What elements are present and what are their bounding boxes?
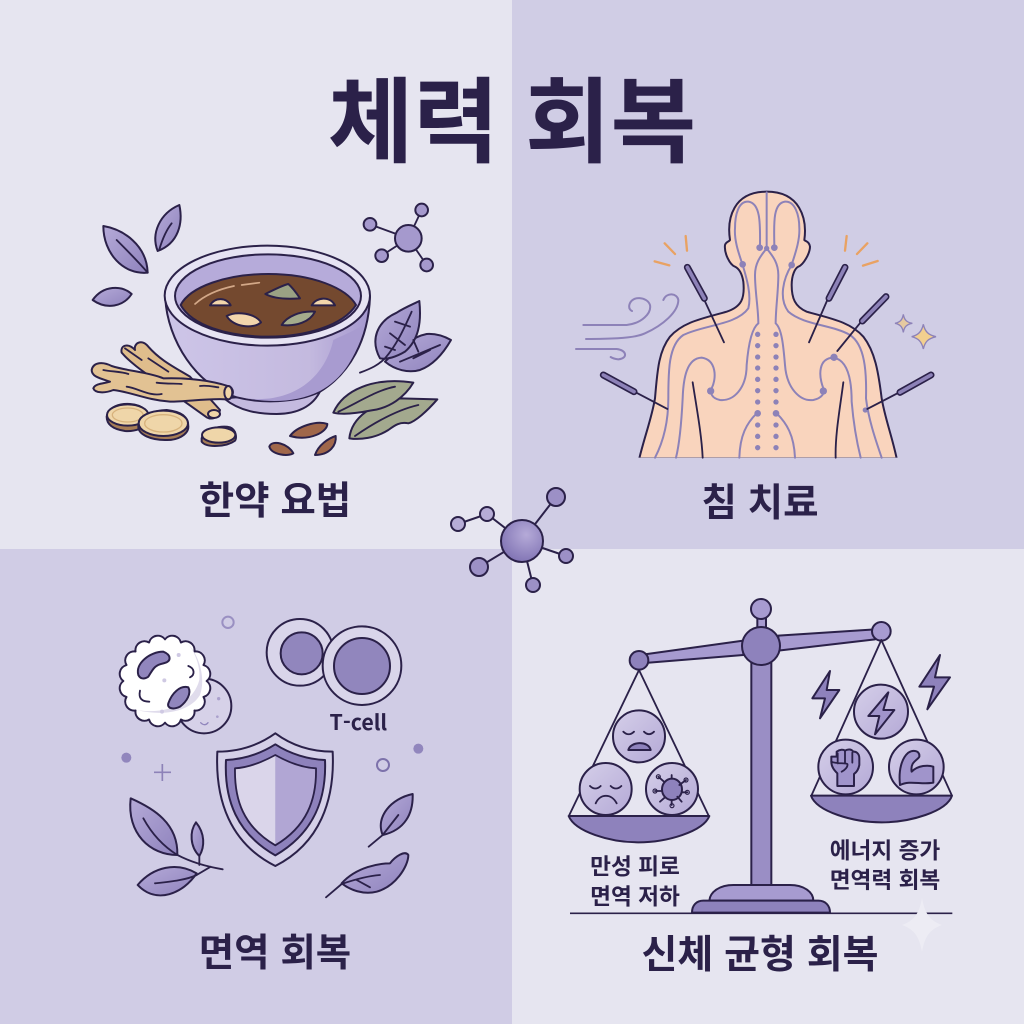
label: acupuncture: 침 치료 <box>701 472 819 528</box>
panel: body balance background <box>512 549 1024 1024</box>
panel: herbal medicine background <box>0 0 512 549</box>
label: body balance recovery: 신체 균형 회복 <box>641 924 879 980</box>
panel: immune recovery background <box>0 549 512 1024</box>
icon: decorative dots and plus <box>121 617 423 781</box>
icon: body silhouette <box>639 192 897 458</box>
icon: central molecule <box>451 488 573 592</box>
icon: acupoints <box>707 244 868 450</box>
icon: right pan with energy, fist and muscle <box>811 640 952 822</box>
icon: bowl foot <box>224 390 321 414</box>
icon: scale beam <box>630 599 891 670</box>
icon: seeds <box>269 423 336 455</box>
illustration: immune cells and shield <box>120 617 423 897</box>
icon: left pan with tired faces and virus <box>569 670 709 842</box>
icon: bowl rim <box>165 246 370 346</box>
illustration: acupuncture body <box>576 192 936 460</box>
icon: bowl body <box>165 297 370 401</box>
icon: small molecule <box>364 204 433 271</box>
icon: white blood cell <box>120 636 220 726</box>
icon: left leaves <box>130 798 223 895</box>
icon: meridian lines <box>655 192 882 458</box>
icon: scale column and base <box>692 657 830 913</box>
icon: olive leaves right <box>333 381 437 439</box>
label: energy increase: 에너지 증가 <box>830 833 940 866</box>
label: immune recovery: 면역 회복 <box>199 922 351 978</box>
icon: shield <box>217 733 333 866</box>
label: T-cell: T-cell <box>329 706 387 737</box>
icon: T-cell circles <box>267 619 401 705</box>
icon: purple leaves right <box>360 301 451 373</box>
icon: ground line <box>570 911 952 916</box>
icon: faint sparkle <box>902 898 942 952</box>
icon: soup with herbs <box>181 274 356 337</box>
illustration: balance scale <box>569 599 952 913</box>
illustration: herbal soup bowl <box>92 204 451 455</box>
icon: lightning bolts <box>812 655 950 718</box>
icon: root slices <box>107 404 236 446</box>
icon: arm lines <box>693 382 843 458</box>
panel: acupuncture background <box>512 0 1024 549</box>
icon: small round cell <box>177 679 231 733</box>
label: immunity recovery: 면역력 회복 <box>830 862 940 895</box>
icon: ginseng root <box>92 342 233 419</box>
label: chronic fatigue: 만성 피로 <box>590 849 680 882</box>
icon: sparkles <box>895 314 936 349</box>
icon: orange rays <box>655 236 878 266</box>
icon: left leaves <box>93 205 181 306</box>
title: 체력 회복 <box>328 47 696 182</box>
icon: right leaves <box>326 794 413 897</box>
label: herbal medicine: 한약 요법 <box>199 470 351 526</box>
icon: needles <box>603 267 931 409</box>
label: low immunity: 면역 저하 <box>590 879 680 912</box>
icon: wind lines <box>576 294 678 359</box>
